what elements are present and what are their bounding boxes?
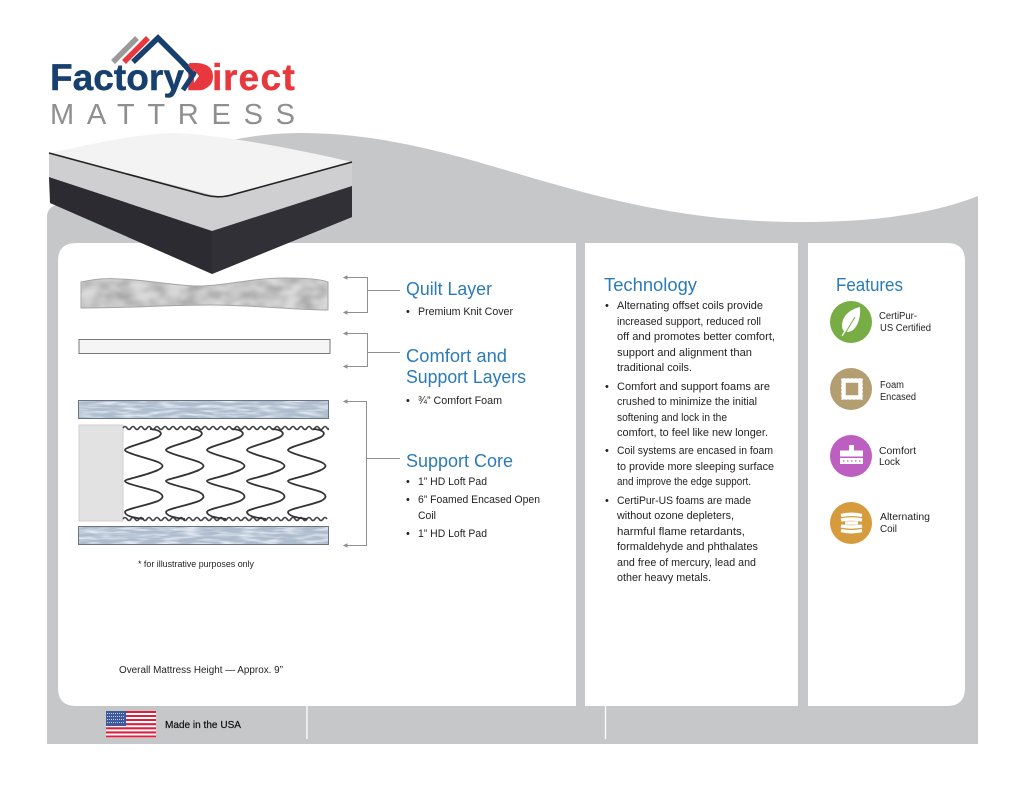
- technology text: other heavy metals.: [617, 572, 711, 584]
- text: support core: Support Core: [406, 451, 513, 471]
- technology text: to provide more sleeping surface: [617, 461, 774, 473]
- logo: solid D shape: [189, 63, 213, 90]
- feature: alternating coil: Coil: [880, 524, 897, 535]
- feature: CertiPur: CertiPur-: [879, 311, 917, 322]
- text: comfort layers: •: [406, 395, 410, 407]
- feature: foam encased: [830, 368, 916, 410]
- bracket: quilt: [344, 276, 400, 314]
- technology text: Alternating offset coils provide: [617, 300, 763, 312]
- technology text: •: [605, 300, 609, 312]
- technology text: •: [605, 445, 609, 457]
- technology text: without ozone depleters,: [616, 510, 734, 522]
- mattress photo: [49, 133, 352, 274]
- technology text: increased support, reduced roll: [617, 316, 761, 328]
- text: comfort layers: [406, 346, 526, 407]
- technology text: off and promotes better comfort,: [617, 331, 775, 343]
- text: comfort layers: Comfort and: [406, 346, 507, 366]
- diagram: coil core: [79, 425, 328, 521]
- panel: construction: [58, 243, 576, 706]
- footer: made in the USA: Made in the USA: [165, 719, 241, 731]
- text: support core: •: [406, 476, 410, 488]
- technology text: •: [605, 495, 609, 507]
- logo: roof stripes: [113, 38, 195, 75]
- text: support core: Coil: [418, 510, 436, 522]
- technology text: [604, 275, 775, 584]
- technology text: support and alignment than: [617, 347, 752, 359]
- technology text: Comfort and support foams are: [617, 381, 770, 393]
- technology text: •: [605, 381, 609, 393]
- logo: [50, 38, 295, 131]
- feature: alternating coil: Alternating: [880, 512, 930, 523]
- logo: arrow overlap: [180, 60, 193, 90]
- technology text: and improve the edge support.: [617, 476, 751, 488]
- features heading: Features: [836, 275, 903, 295]
- technology text: softening and lock in the: [617, 412, 727, 424]
- background: gray wave: [47, 133, 978, 744]
- technology text: formaldehyde and phthalates: [617, 541, 758, 553]
- feature: comfort lock: [830, 435, 916, 477]
- feature: CertiPur: [830, 301, 931, 343]
- technology text: and free of mercury, lead and: [617, 557, 756, 569]
- technology text: CertiPur-US foams are made: [617, 495, 751, 507]
- bracket: support: [344, 400, 400, 547]
- technology text: Technology: [604, 275, 697, 295]
- logo: Factory wordmark: Factory: [50, 57, 184, 98]
- footer: flag: [106, 711, 156, 738]
- text: quilt layer: •: [406, 306, 410, 318]
- feature: CertiPur: US Certified: [880, 323, 931, 334]
- text: support core: 6” Foamed Encased Open: [418, 494, 540, 506]
- text: quilt layer: [406, 279, 513, 318]
- diagram: top loft pad: [78, 400, 328, 418]
- bracket: comfort: [344, 332, 400, 368]
- technology text: comfort, to feel like new longer.: [617, 427, 768, 439]
- diagram: comfort layer: [79, 340, 330, 354]
- panel: features: [808, 243, 965, 706]
- technology text: Coil systems are encased in foam: [617, 445, 773, 457]
- text: support core: •: [406, 528, 410, 540]
- text: comfort layers: Support Layers: [406, 367, 526, 387]
- technology text: harmful flame retardants,: [617, 526, 745, 538]
- technology text: traditional coils.: [617, 362, 692, 374]
- text: quilt layer: Premium Knit Cover: [418, 306, 513, 318]
- note: illustrative: * for illustrative purposes only: [138, 559, 254, 569]
- feature: comfort lock: Lock: [879, 457, 901, 468]
- text: comfort layers: ¾” Comfort Foam: [418, 395, 502, 407]
- text: support core: [406, 451, 540, 540]
- feature: foam encased: Foam: [880, 380, 904, 391]
- technology text: crushed to minimize the initial: [617, 396, 757, 408]
- text: support core: 1” HD Loft Pad: [418, 528, 487, 540]
- diagram: bottom loft pad: [78, 526, 328, 544]
- feature: foam encased: Encased: [880, 392, 916, 403]
- logo: Mattress wordmark: MATTRESS: [50, 99, 295, 131]
- feature: comfort lock: Comfort: [879, 446, 916, 457]
- text: quilt layer: Quilt Layer: [406, 279, 492, 299]
- feature: alternating coil: [830, 502, 930, 544]
- panel: technology: [585, 243, 798, 706]
- text: support core: 1” HD Loft Pad: [418, 476, 487, 488]
- logo: Direct wordmark: Direct: [186, 57, 295, 98]
- text: support core: •: [406, 494, 410, 506]
- diagram: quilt layer: [81, 278, 328, 311]
- note: mattress height: Overall Mattress Height — Approx. 9”: [119, 665, 283, 676]
- footer: dividers: [307, 706, 606, 739]
